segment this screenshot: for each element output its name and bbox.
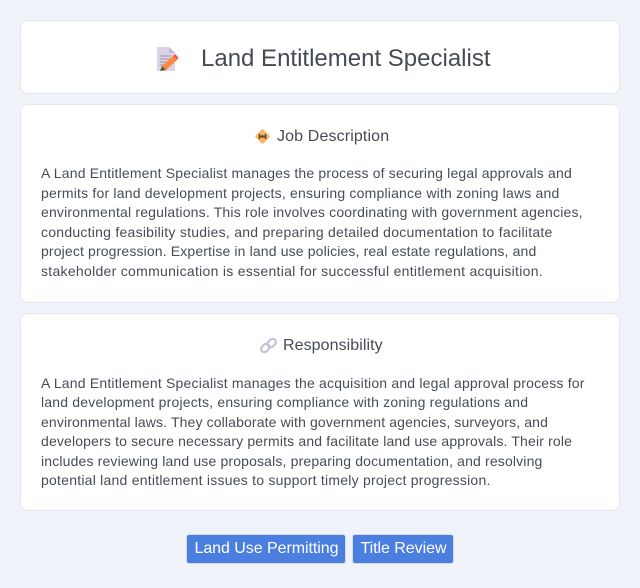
panel: job description <box>20 104 620 303</box>
icon: document with pencil <box>157 47 178 71</box>
text: job description paragraph: conducting feasibility studies, and preparing detailed documentation to facilitate <box>41 224 553 240</box>
text: responsibility paragraph <box>41 374 585 488</box>
text: job description paragraph: environmental regulations. This role involves coordinating with government agencies, <box>41 204 583 220</box>
tag: title review: Title Review <box>361 540 446 557</box>
text: responsibility paragraph: A Land Entitlement Specialist manages the acquisition and legal approval process for <box>41 374 585 390</box>
text: job description paragraph: project progression. Expertise in land use policies, real estate regulations, and <box>41 243 536 259</box>
text: job description paragraph: permits for land development projects, ensuring compliance with zoning laws and <box>41 184 560 200</box>
text: job description paragraph <box>41 165 583 279</box>
title: Land Entitlement Specialist <box>201 45 490 72</box>
panel: responsibility <box>20 313 620 511</box>
text: responsibility paragraph: environmental laws. They collaborate with government agencies, surveyors, and <box>41 414 548 430</box>
tag: land use permitting <box>186 534 346 564</box>
tag: title review <box>352 534 454 564</box>
icon: road sign diamond <box>255 129 270 144</box>
text: responsibility paragraph: potential land entitlement issues to support timely project progression. <box>41 472 491 488</box>
heading: job description: Job Description <box>277 128 389 145</box>
text: responsibility paragraph: includes reviewing land use proposals, preparing documentation, and resolving <box>41 452 542 468</box>
text: responsibility paragraph: developers to secure necessary permits and facilitate land use approvals. Their role <box>41 433 572 449</box>
tag: land use permitting: Land Use Permitting <box>194 540 338 557</box>
text: responsibility paragraph: land development projects, ensuring compliance with zoning regulations and <box>41 394 528 410</box>
heading: responsibility: Responsibility <box>283 337 383 354</box>
panel: title card <box>20 20 620 94</box>
text: job description paragraph: stakeholder communication is essential for successful entitlement acquisition. <box>41 262 543 278</box>
text: job description paragraph: A Land Entitlement Specialist manages the process of securing legal approvals and <box>41 165 572 181</box>
icon: chain link <box>260 338 277 354</box>
